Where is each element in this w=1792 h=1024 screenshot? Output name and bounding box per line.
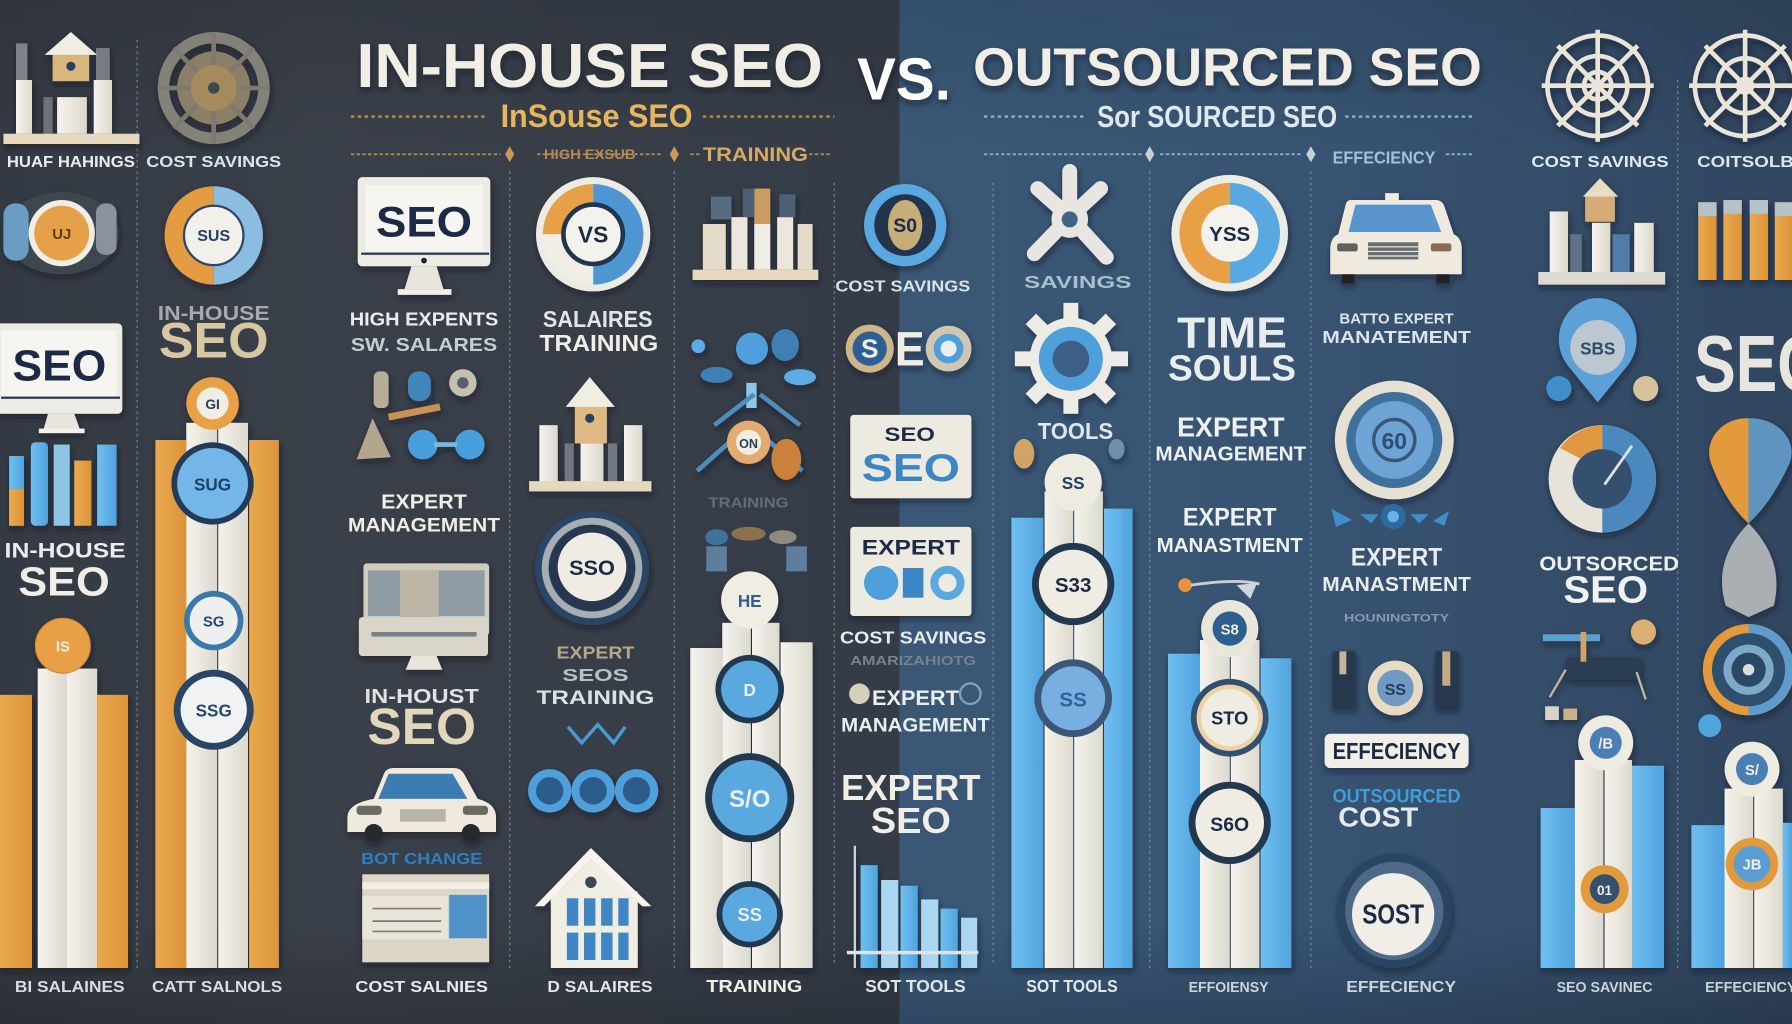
label: in-house seo bbox=[5, 538, 126, 604]
label: salaires training: SALAIRES bbox=[543, 306, 653, 332]
marker: cream: S33 bbox=[1055, 574, 1091, 597]
label: outsourced cost: OUTSOURCED bbox=[1333, 785, 1461, 807]
label: high expents salares: HIGH EXPENTS bbox=[350, 309, 498, 330]
marker: gold ring bbox=[1191, 679, 1269, 757]
icon: gauge: YSS bbox=[1209, 223, 1250, 246]
label: expert manastment bbox=[1157, 504, 1303, 557]
label: COST SAVINGS bbox=[1531, 154, 1669, 171]
label: expert manastment: EXPERT bbox=[1183, 504, 1277, 532]
icon: gauge bbox=[1549, 425, 1656, 533]
icon: tool cluster bbox=[357, 369, 485, 459]
icon: orange bars bbox=[1698, 200, 1792, 280]
marker: cream bbox=[1578, 715, 1633, 770]
icon: ship wheel bbox=[1689, 30, 1792, 142]
icon: target ring bbox=[1703, 624, 1792, 715]
icon: SEO card bbox=[850, 415, 971, 498]
title bbox=[357, 32, 1482, 112]
icon: seal with tools: SS bbox=[1385, 682, 1406, 699]
label: time souls: TIME bbox=[1177, 309, 1287, 357]
label: salaires training: TRAINING bbox=[539, 330, 658, 356]
icon: SEO badge bbox=[846, 324, 971, 377]
bar chart bbox=[1168, 600, 1291, 968]
icon: blue network bbox=[691, 329, 816, 480]
icon: pillars house bbox=[529, 377, 651, 491]
marker: cream bbox=[1032, 543, 1114, 625]
icon: SEO badge: E bbox=[895, 324, 925, 377]
column headings: outsourced: EFFECIENCY bbox=[1333, 147, 1436, 167]
label: in-house seo: SEO bbox=[159, 312, 269, 369]
bar chart bbox=[1541, 715, 1664, 968]
icon: blue pin: SBS bbox=[1580, 338, 1615, 358]
label: time souls bbox=[1168, 309, 1296, 389]
label: expert management: EXPERT bbox=[872, 685, 960, 710]
marker: cream: S/ bbox=[1745, 763, 1759, 779]
bar chart: IS bbox=[56, 639, 70, 655]
panel: column 4 bbox=[528, 177, 658, 996]
label: expert seos training bbox=[537, 642, 654, 709]
icon: document bbox=[362, 874, 489, 962]
label: in-house seo: IN-HOUST bbox=[365, 685, 479, 708]
label: SOT TOOLS bbox=[865, 976, 966, 996]
title: in-house: IN-HOUSE SEO bbox=[357, 32, 823, 101]
callout: efficiency pill: EFFECIENCY bbox=[1333, 738, 1461, 764]
icon: small ornaments bbox=[705, 527, 807, 571]
panel: column 5 bbox=[690, 189, 971, 996]
label: expert manastment bbox=[1322, 544, 1471, 596]
subtitle: in-house: InSouse SEO bbox=[501, 98, 693, 134]
icon: SEO monitor bbox=[0, 323, 122, 433]
marker: cream top: SS bbox=[1062, 473, 1085, 493]
label: expert seos training: EXPERT bbox=[557, 642, 635, 662]
bar chart bbox=[155, 377, 279, 968]
icon: building bar chart bbox=[693, 189, 818, 280]
panel: column 1 bbox=[0, 32, 139, 996]
label: expert management bbox=[1322, 311, 1472, 347]
icon: pillars house bbox=[1538, 178, 1665, 285]
label: cost savings: AMARIZAHIOTG bbox=[850, 654, 976, 668]
icon: blue pin bbox=[1546, 298, 1658, 402]
marker: blue small: SG bbox=[203, 614, 224, 630]
label: expert management: MANATEMENT bbox=[1322, 327, 1472, 347]
label: BOT CHANGE bbox=[361, 851, 483, 868]
icon: three blue seals bbox=[528, 769, 658, 813]
marker: cream top bbox=[1045, 454, 1102, 511]
marker: orange bbox=[1581, 865, 1629, 913]
icon: SEO card: SEO bbox=[862, 447, 960, 490]
icon: expert SEO card bbox=[850, 527, 971, 616]
label: expert manastment: MANASTMENT bbox=[1322, 573, 1471, 596]
marker: blue bbox=[1034, 659, 1112, 737]
label: EFFOIENSY bbox=[1189, 980, 1269, 996]
marker: white bbox=[174, 670, 254, 750]
marker: dark ring bbox=[1189, 782, 1271, 864]
panel: column 2 bbox=[146, 32, 283, 996]
column headings: in-house: HIGH EXSUB bbox=[544, 147, 636, 162]
panel: column 11 bbox=[1689, 30, 1792, 996]
icon: gear bbox=[158, 32, 270, 144]
panel: column 8 bbox=[1155, 175, 1307, 996]
marker: orange: GI bbox=[205, 397, 220, 412]
label: in-house seo: SEO bbox=[367, 697, 476, 755]
title: outsourced: OUTSOURCED SEO bbox=[973, 38, 1482, 98]
panel: column 9 bbox=[1322, 193, 1472, 996]
label: HUAF HAHINGS bbox=[7, 154, 135, 171]
marker: orange: 01 bbox=[1597, 883, 1613, 898]
icon: dial: SSO bbox=[569, 555, 615, 580]
label: SOT TOOLS bbox=[1026, 976, 1118, 996]
marker: blue bottom: SS bbox=[738, 904, 762, 925]
subtitle: outsourced: Sor SOURCED SEO bbox=[1097, 99, 1337, 134]
marker: blue large: S/O bbox=[729, 786, 770, 813]
icon: pointer bbox=[1178, 578, 1259, 599]
mini bar chart bbox=[9, 442, 117, 526]
label: expert management: MANAGEMENT bbox=[348, 514, 500, 536]
label: D SALAIRES bbox=[547, 979, 653, 996]
icon: orange disc bbox=[3, 192, 119, 274]
marker: cream: /B bbox=[1598, 737, 1613, 753]
icon: blue wings bbox=[1331, 504, 1449, 529]
icon: orange disc: UJ bbox=[52, 227, 71, 243]
label: TOOLS bbox=[1038, 418, 1113, 444]
marker: blue bottom bbox=[717, 881, 783, 947]
label: COITSOLBIE bbox=[1697, 154, 1792, 171]
marker: cream top bbox=[1201, 600, 1258, 657]
marker: blue bbox=[715, 655, 784, 723]
label: time souls: SOULS bbox=[1168, 348, 1296, 389]
icon: gray monitor bbox=[359, 563, 489, 670]
label: cost savings bbox=[840, 627, 986, 668]
icon: SEO card: SEO bbox=[885, 424, 935, 446]
icon: wave bbox=[568, 725, 625, 743]
label: high expents salares bbox=[350, 309, 498, 355]
label: expert seo: EXPERT bbox=[841, 767, 981, 808]
marker: orange bbox=[1726, 838, 1778, 890]
label: expert management bbox=[348, 491, 500, 536]
panel: column 7 bbox=[1011, 171, 1133, 996]
marker: gold ring: STO bbox=[1211, 708, 1248, 729]
background: outsourced side bbox=[899, 0, 1792, 1024]
icon: hourglass bbox=[1709, 418, 1792, 617]
icon: machinery bbox=[1543, 619, 1656, 720]
panel: column 10 bbox=[1531, 30, 1679, 996]
icon: cream ring seal bbox=[1335, 381, 1454, 499]
background: in-house side bbox=[0, 0, 899, 1024]
icon: house bbox=[535, 848, 651, 968]
icon: tool star bbox=[1034, 171, 1106, 257]
label: expert seos training: TRAINING bbox=[537, 687, 654, 709]
label: SEO SAVINEC bbox=[1557, 980, 1653, 996]
label: expert management: MANAGEMENT bbox=[841, 714, 990, 736]
marker: blue large: SUG bbox=[194, 474, 231, 494]
label: expert management bbox=[841, 683, 990, 736]
label: expert management: MANAGEMENT bbox=[1155, 443, 1307, 466]
icon: seal with tools bbox=[1333, 651, 1458, 715]
label: high expents salares: SW. SALARES bbox=[351, 334, 497, 355]
label: HOUNINGTOTY bbox=[1344, 613, 1450, 625]
marker: blue: SS bbox=[1059, 688, 1087, 711]
icon: dial bbox=[535, 511, 649, 625]
bar chart bbox=[0, 618, 128, 968]
title: vs: VS. bbox=[857, 45, 951, 112]
icon: car bbox=[1330, 193, 1462, 283]
marker: orange bbox=[186, 377, 239, 430]
label: COST SAVINGS bbox=[146, 154, 282, 171]
marker: white: SSG bbox=[196, 701, 232, 721]
label: COST SALNIES bbox=[355, 979, 488, 996]
marker: cream bbox=[1725, 742, 1779, 797]
bar chart bbox=[847, 846, 978, 968]
label: in-house seo: SEO bbox=[18, 558, 110, 604]
label: salaires training bbox=[539, 306, 658, 356]
icon: cream ring seal: 60 bbox=[1382, 428, 1407, 454]
icon: SEO badge: S bbox=[861, 334, 878, 364]
label: expert seos training: SEOS bbox=[562, 665, 629, 685]
label: expert management: EXPERT bbox=[381, 491, 467, 514]
icon: donut: SUS bbox=[197, 228, 230, 245]
marker: cream top: S8 bbox=[1221, 622, 1239, 638]
bar chart bbox=[1011, 439, 1133, 968]
panel: column 3 bbox=[347, 177, 500, 996]
bar chart bbox=[1691, 742, 1792, 968]
label: outsourced seo bbox=[1539, 552, 1679, 610]
marker: dark ring: S6O bbox=[1210, 814, 1249, 836]
marker: blue small bbox=[184, 591, 243, 650]
icon: VS gauge bbox=[536, 177, 650, 291]
label: expert manastment: EXPERT bbox=[1351, 544, 1443, 572]
label: outsourced seo: OUTSORCED bbox=[1539, 552, 1679, 575]
marker: blue large bbox=[171, 442, 254, 525]
label: expert management: BATTO EXPERT bbox=[1339, 311, 1454, 327]
icon: blue network: ON bbox=[739, 437, 758, 451]
marker: blue large bbox=[705, 753, 794, 842]
marker: blue: D bbox=[744, 680, 756, 700]
icon: donut bbox=[165, 186, 263, 285]
label: outsourced seo: SEO bbox=[1563, 568, 1648, 610]
column headings: outsourced bbox=[984, 146, 1474, 167]
label: BI SALAINES bbox=[15, 979, 125, 996]
marker: orange: JB bbox=[1743, 858, 1762, 874]
icon: pillars house bbox=[3, 32, 139, 144]
marker: cream bbox=[721, 571, 778, 629]
label: expert management: EXPERT bbox=[1177, 412, 1285, 443]
icon: gauge bbox=[1171, 175, 1288, 291]
marker: cream: HE bbox=[738, 591, 762, 611]
label: expert seo: SEO bbox=[871, 800, 951, 841]
label: expert management bbox=[1155, 412, 1307, 466]
column headings: in-house: TRAINING bbox=[703, 144, 808, 166]
icon: VS gauge: VS bbox=[578, 221, 608, 247]
icon: sost dial bbox=[1337, 854, 1451, 968]
icon: blue dot bbox=[1698, 714, 1721, 737]
label: TRAINING bbox=[706, 976, 802, 996]
callout: efficiency pill bbox=[1325, 734, 1469, 768]
label: cost savings: COST SAVINGS bbox=[840, 627, 986, 647]
label: COST SAVINGS bbox=[835, 278, 971, 295]
panel: column 6 bbox=[840, 184, 990, 996]
label: outsourced cost: COST bbox=[1338, 801, 1419, 832]
icon: sost dial: SOST bbox=[1362, 898, 1424, 929]
bar chart bbox=[690, 571, 813, 968]
label: CATT SALNOLS bbox=[152, 979, 283, 996]
icon: coin seal bbox=[864, 184, 946, 266]
icon: gear bbox=[1015, 303, 1128, 414]
label: EFFECIENCY bbox=[1346, 979, 1456, 996]
label: outsourced cost bbox=[1333, 785, 1461, 832]
icon: coin seal: S0 bbox=[893, 215, 917, 237]
icon: SEO monitor: SEO bbox=[13, 343, 106, 391]
column headings: in-house bbox=[351, 144, 832, 166]
label: expert seo bbox=[841, 767, 981, 841]
label: TRAINING bbox=[709, 495, 789, 511]
label: in-house seo: IN-HOUSE bbox=[158, 302, 270, 325]
label: in-house seo: IN-HOUSE bbox=[5, 538, 126, 563]
icon: car bbox=[347, 768, 496, 842]
label: SAVINGS bbox=[1024, 272, 1131, 292]
label: expert manastment: MANASTMENT bbox=[1157, 534, 1303, 557]
icon: ship wheel bbox=[1542, 30, 1654, 142]
icon: expert SEO card: EXPERT bbox=[862, 534, 961, 559]
icon: SEO monitor: SEO bbox=[376, 199, 472, 246]
icon: SEO monitor bbox=[358, 177, 490, 295]
